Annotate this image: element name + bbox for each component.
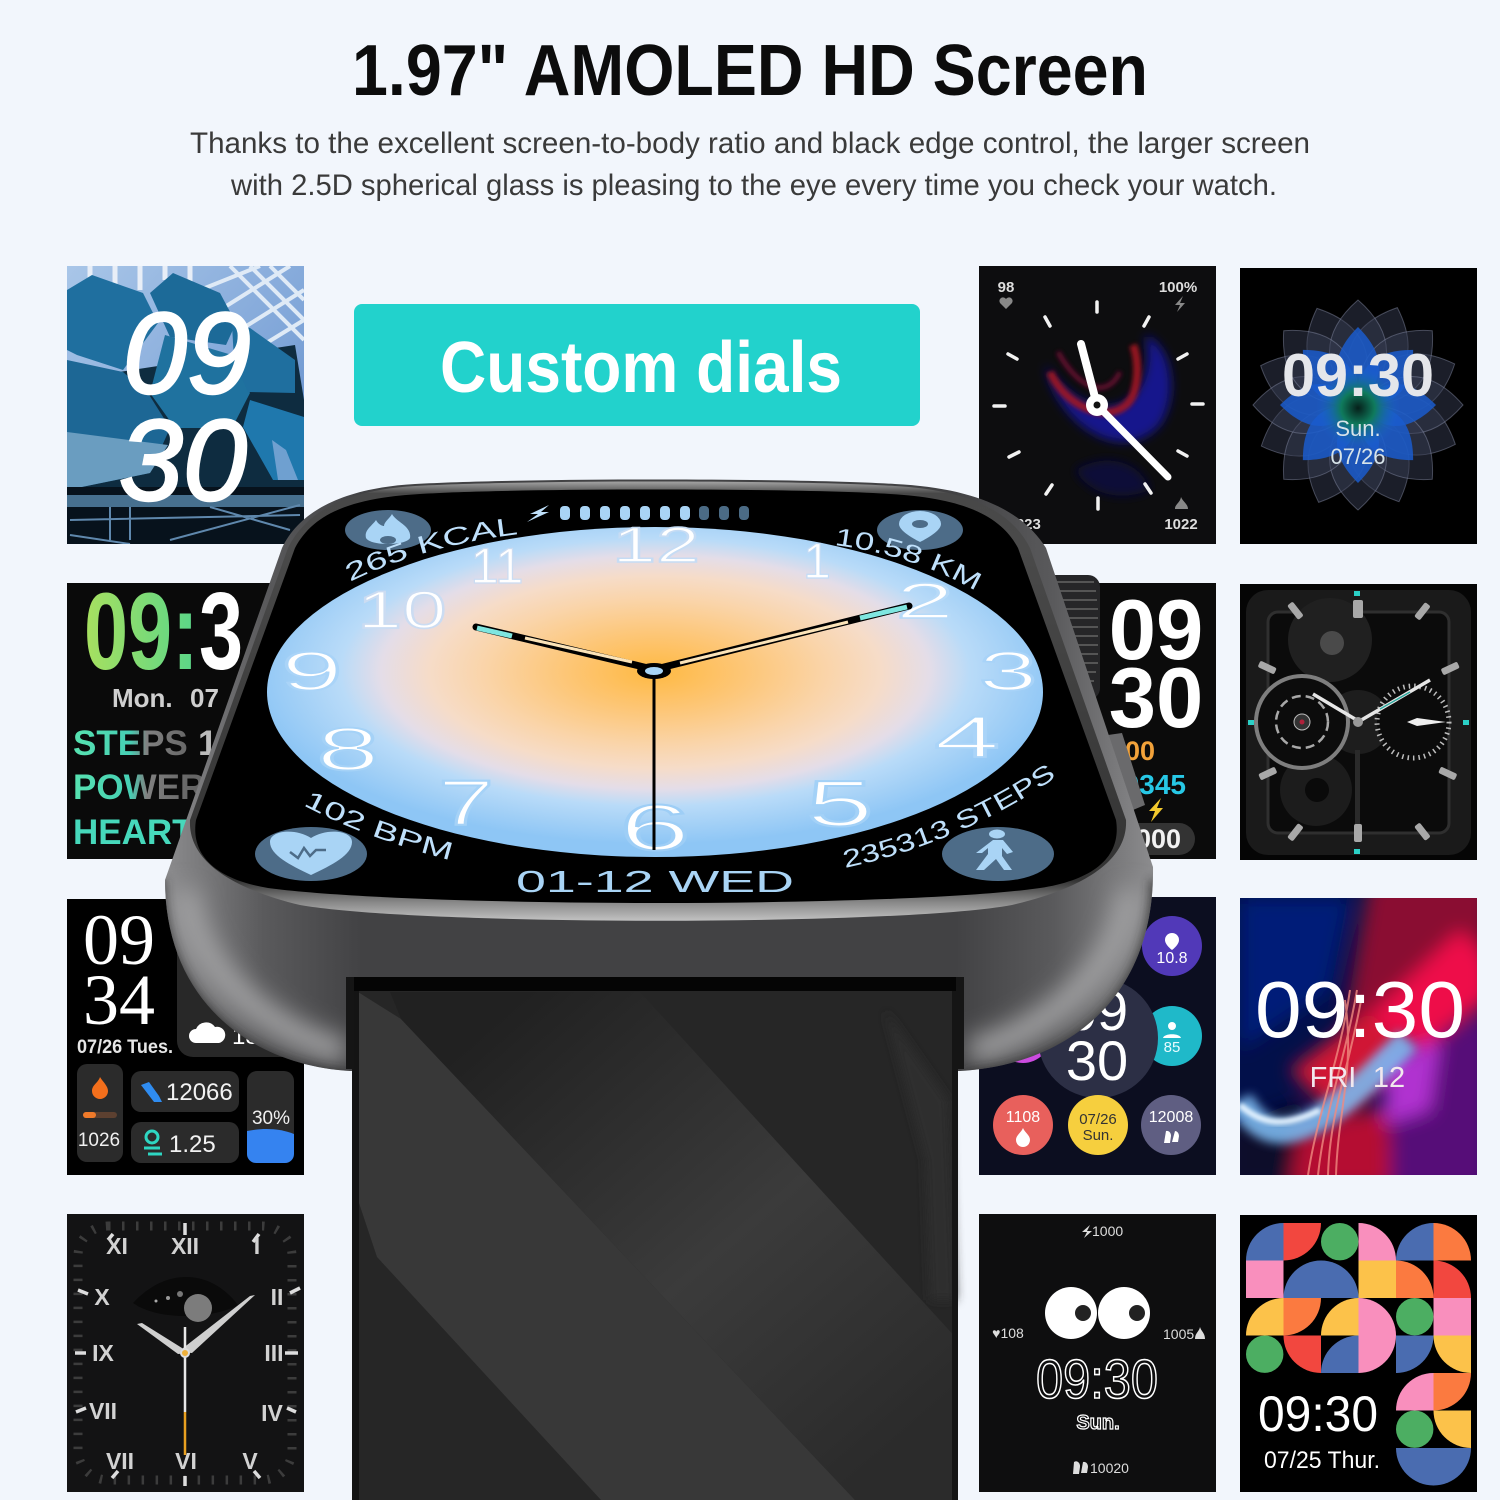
panel: big digits dial: 1000 xyxy=(1095,736,1155,766)
panel: abstract light dial: 09:30 xyxy=(1255,965,1465,1054)
moon dome xyxy=(133,1277,238,1322)
black glass xyxy=(195,490,1117,903)
panel: analog swirl dial: 1022 xyxy=(1164,516,1198,533)
panel: colourful bubbles dial: Sun. xyxy=(1083,1127,1113,1144)
icon: small flame xyxy=(1195,1327,1205,1339)
subtitle text: Thanks to the excellent screen-to-body ratio and black edge control, the larger screen xyxy=(190,127,1310,160)
dial numerals: 4 xyxy=(934,704,1000,770)
panel: roman numeral dial: XII xyxy=(171,1233,199,1259)
metric: calories: 265 KCAL xyxy=(346,519,517,581)
icon: distance pin xyxy=(144,1131,162,1154)
panel: sports stats dial: 3 xyxy=(199,570,243,693)
dial numerals: 8 xyxy=(317,716,379,783)
custom dials badge: Custom dials xyxy=(440,328,842,408)
mechanical hands xyxy=(1313,680,1430,727)
panel: analog swirl dial: 100% xyxy=(1159,279,1197,296)
panel: big digits dial: 1000 xyxy=(1121,824,1181,854)
digital crown xyxy=(1040,575,1100,700)
watch strap xyxy=(346,977,964,1500)
icon: small bolt xyxy=(1175,296,1185,312)
panel: serif time with widgets dial: 1.25 xyxy=(169,1131,216,1158)
panel: colourful bubbles dial: 09 xyxy=(1066,979,1128,1042)
date readout: 01-12 WED xyxy=(516,864,794,899)
watch case xyxy=(160,480,1155,1076)
icon: pin xyxy=(1165,933,1179,950)
panel: colourful bubbles dial: 30 xyxy=(1066,1029,1128,1092)
icon: small bolt xyxy=(1082,1225,1092,1238)
metric: distance: 10.58 KM xyxy=(836,529,982,590)
panel: googly eyes dial xyxy=(979,1214,1216,1492)
panel: googly eyes dial: 10020 xyxy=(1090,1460,1129,1476)
panel: analog swirl dial: 98 xyxy=(998,279,1014,296)
icon: footprints xyxy=(1164,1131,1179,1143)
dial numerals: 2 xyxy=(896,574,954,629)
icon: small flame xyxy=(1175,497,1188,509)
icon: flame xyxy=(92,1077,108,1099)
panel: googly eyes dial: 1005 xyxy=(1163,1326,1194,1342)
panel: blue architecture dial: 30 xyxy=(119,397,247,525)
panel: abstract light dial: 12 xyxy=(1373,1062,1405,1094)
panel: serif time with widgets dial: 30% xyxy=(252,1108,290,1129)
panel: roman numeral dial: IX xyxy=(92,1340,115,1366)
dial numerals xyxy=(281,517,1037,864)
panel: big digits dial: 10345 xyxy=(1108,769,1186,800)
dial numerals: 6 xyxy=(620,792,690,864)
panel: sports stats dial: 07 xyxy=(190,683,219,713)
title: 1.97" AMOLED HD Screen xyxy=(352,31,1148,111)
panel: roman numeral dial xyxy=(67,1214,304,1492)
panel: roman numeral dial: II xyxy=(271,1284,283,1310)
icon: flame xyxy=(1016,1128,1030,1147)
panel: analog swirl dial xyxy=(979,266,1216,544)
smartwatch xyxy=(165,480,1153,1500)
panel: serif time with widgets dial: 1026 xyxy=(78,1130,120,1151)
panel: roman numeral dial: III xyxy=(264,1340,284,1366)
right subdial xyxy=(1377,686,1449,758)
panel: geometric bauhaus dial: 07/25 Thur. xyxy=(1264,1447,1380,1474)
panel: sports stats dial: POWER xyxy=(73,768,205,807)
clock hands xyxy=(137,1295,255,1455)
panel: roman numeral dial: XI xyxy=(106,1233,128,1259)
dial numerals: 1 xyxy=(803,533,831,589)
panel: roman numeral dial: I xyxy=(254,1233,260,1259)
subtitle text: with 2.5D spherical glass is pleasing to the eye every time you check your watch. xyxy=(230,169,1277,202)
case rim xyxy=(190,482,1126,921)
panel: roman numeral dial: V xyxy=(242,1448,258,1474)
panel: serif time with widgets dial: 18 xyxy=(232,1023,259,1050)
custom dials badge xyxy=(354,304,920,426)
dial numerals: 7 xyxy=(438,767,494,839)
left subdial xyxy=(1256,676,1348,768)
panel: googly eyes dial: Sun. xyxy=(1076,1412,1120,1434)
subtitle text xyxy=(190,127,1310,202)
panel: big digits dial: 09 xyxy=(1109,583,1203,678)
panel: roman numeral dial: IV xyxy=(261,1400,284,1426)
side button xyxy=(1108,733,1145,810)
panel: colourful bubbles dial: 10.8 xyxy=(1156,950,1188,967)
icon: yellow bolt xyxy=(1149,798,1163,822)
panel: colourful bubbles dial: 12008 xyxy=(1149,1109,1193,1126)
panel: roman numeral dial: X xyxy=(94,1284,110,1310)
panel: roman numeral dial: VII xyxy=(89,1398,117,1424)
panel: colourful bubbles dial xyxy=(979,897,1216,1175)
dial numerals: 12 xyxy=(612,517,700,573)
panel: abstract light dial xyxy=(1240,898,1477,1175)
panel: serif time with widgets dial: 07/26 Tues. xyxy=(77,1037,173,1058)
panel: googly eyes dial: 09:30 xyxy=(1036,1348,1158,1410)
panel: sports stats dial xyxy=(67,570,304,859)
panel: lotus flower dial: 07/26 xyxy=(1330,444,1386,469)
icon: eyes xyxy=(1045,1287,1150,1339)
icon: running shoe xyxy=(141,1082,162,1102)
dial numerals: 10 xyxy=(358,581,446,640)
panel: analog swirl dial: 10223 xyxy=(999,516,1041,533)
clock hands xyxy=(476,606,909,850)
metric: steps: 235313 STEPS xyxy=(844,766,1054,868)
metric: heart rate xyxy=(255,794,452,881)
panel: lotus flower dial xyxy=(1240,268,1477,544)
panel: sports stats dial: 09: xyxy=(84,570,198,693)
panel: serif time with widgets dial: 12066 xyxy=(166,1079,233,1106)
dial face xyxy=(267,527,1043,857)
panel: googly eyes dial: 1000 xyxy=(1092,1223,1123,1239)
panel: roman numeral dial: VI xyxy=(175,1448,197,1474)
panel: sports stats dial: STEPS xyxy=(73,724,188,763)
panel: lotus flower dial: 09:30 xyxy=(1282,342,1434,409)
panel: lotus flower dial: Sun. xyxy=(1335,416,1381,441)
panel: blue architecture dial xyxy=(67,266,304,544)
panel: geometric bauhaus dial xyxy=(1240,1215,1477,1492)
dial numerals: 3 xyxy=(979,640,1037,702)
panel: serif time with widgets dial: 09 xyxy=(83,900,155,980)
icon: cloud xyxy=(189,1022,225,1043)
panel: serif time with widgets dial xyxy=(67,899,304,1175)
panel: serif time with widgets dial: 34 xyxy=(83,960,155,1040)
panel: sports stats dial: 1 xyxy=(198,724,217,763)
panel: sports stats dial: HEART xyxy=(73,813,194,852)
panel: colourful bubbles dial: 1108 xyxy=(1006,1109,1040,1126)
panel: abstract light dial: FRI xyxy=(1310,1062,1356,1094)
dial numerals: 5 xyxy=(807,768,873,840)
panel: blue architecture dial: 09 xyxy=(123,290,251,418)
icon: footprints xyxy=(1073,1461,1088,1474)
metric: heart rate: 102 BPM xyxy=(305,794,452,860)
panel: mechanical skeleton dial xyxy=(1240,584,1477,860)
icon: person heart xyxy=(1163,1022,1181,1038)
panel: colourful bubbles dial: 07/26 xyxy=(1079,1111,1117,1128)
hour markers xyxy=(1248,591,1469,854)
panel: big digits dial: 30 xyxy=(1109,651,1203,746)
panel: colourful bubbles dial: 85 xyxy=(1164,1039,1180,1056)
dial numerals: 11 xyxy=(471,537,523,594)
icon: small heart xyxy=(999,297,1013,309)
dial numerals: 9 xyxy=(281,641,343,702)
panel: googly eyes dial: ♥108 xyxy=(992,1325,1024,1341)
battery bar xyxy=(527,505,749,522)
panel: geometric bauhaus dial: 09:30 xyxy=(1258,1386,1378,1442)
panel: roman numeral dial: VII xyxy=(106,1448,134,1474)
panel: sports stats dial: Mon. xyxy=(112,683,173,713)
panel: big digits dial xyxy=(979,583,1216,859)
